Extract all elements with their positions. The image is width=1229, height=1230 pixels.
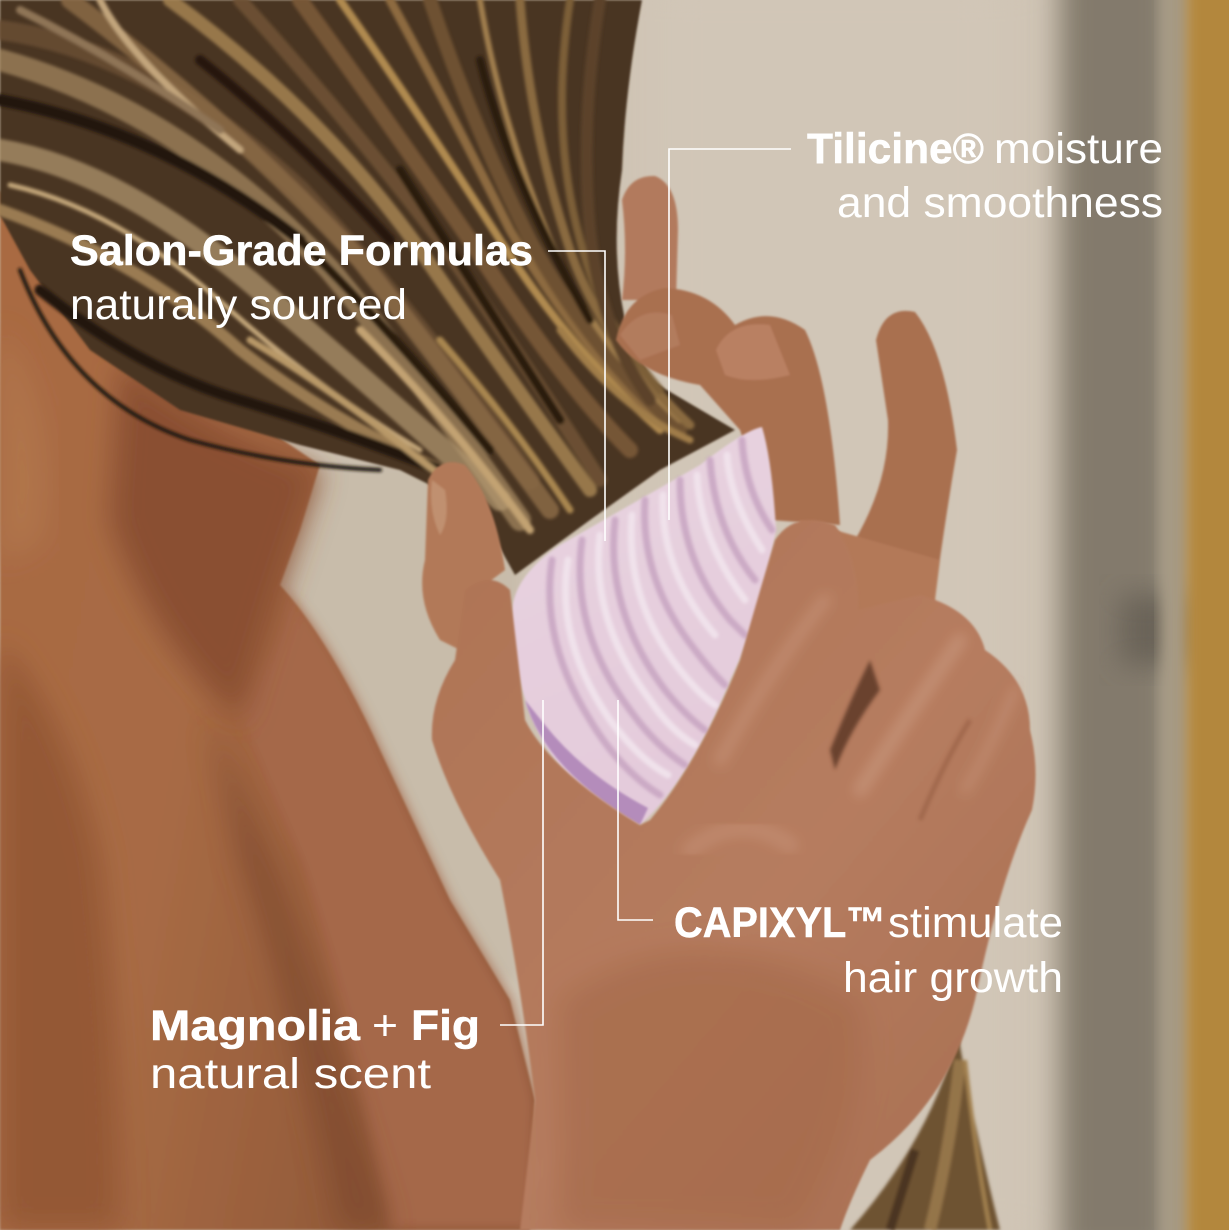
leader line: Salon-Grade	[548, 251, 605, 541]
callout: Magnolia + Fig natural scent: Magnolia	[150, 1002, 361, 1050]
leader line: Tilicine	[669, 149, 791, 520]
callout: Tilicine moisture and smoothness: and smoothness	[837, 179, 1163, 227]
callout: CAPIXYL stimulate hair growth: stimulate	[888, 899, 1063, 947]
callout: Salon-Grade Formulas naturally sourced	[70, 227, 605, 541]
photo: wet hair	[0, 0, 735, 575]
photo: hair strands below the hand	[850, 1035, 1000, 1230]
callout: Tilicine moisture and smoothness: moisture	[994, 125, 1163, 173]
callout: Magnolia + Fig natural scent: natural scent	[150, 1050, 431, 1098]
leader line: CAPIXYL	[618, 700, 653, 920]
callout: Salon-Grade Formulas naturally sourced: naturally sourced	[70, 281, 407, 329]
callout: Magnolia + Fig natural scent: Fig	[411, 1002, 480, 1050]
callout: Tilicine moisture and smoothness	[669, 125, 1163, 520]
callout: CAPIXYL stimulate hair growth: CAPIXYL™	[674, 899, 886, 947]
callout: Tilicine moisture and smoothness: Tilicine®	[807, 125, 984, 173]
photo: thumb and hand holding the bar	[422, 462, 1036, 1230]
callout: CAPIXYL stimulate hair growth: hair growth	[843, 954, 1063, 1002]
photo: raised fingers behind the bar	[616, 176, 957, 640]
callout: Magnolia + Fig natural scent	[150, 700, 543, 1098]
photo: neck and shoulder	[0, 190, 535, 1230]
leader line: Magnolia	[500, 700, 543, 1025]
callout: Salon-Grade Formulas naturally sourced: Salon-Grade Formulas	[70, 227, 533, 275]
callout: CAPIXYL stimulate hair growth	[618, 700, 1063, 1002]
photo: pink shampoo bar	[512, 427, 776, 825]
callout: Magnolia + Fig natural scent: +	[372, 1002, 398, 1050]
